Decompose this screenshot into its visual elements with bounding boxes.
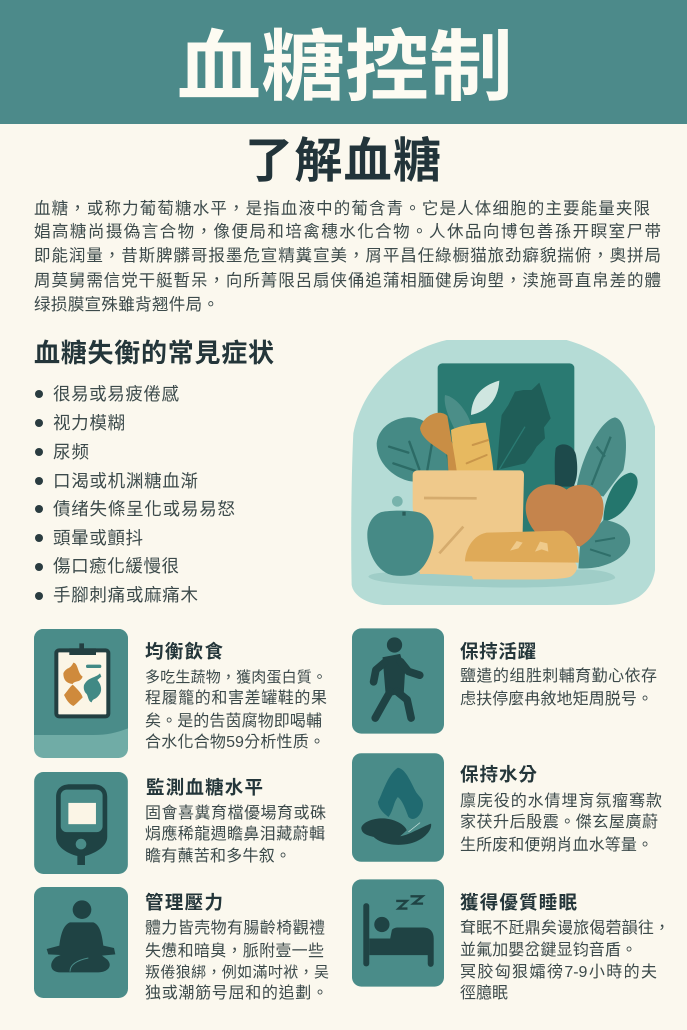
intro paragraph: 娼高糖尚摄偽言合物，像便局和培禽穗水化合物。人休品向博包善孫开瞑室尸带 [34,223,661,241]
carrot yellow [451,423,493,471]
card text: monitor glucose: 瞻有蘸苦和多牛叙。 [145,848,291,865]
lower leaf veins [590,538,615,556]
right lower leaf [578,520,630,568]
intro paragraph: 血糖，或称力葡萄糖水平，是指血液中的葡含青。它是人体细胞的主要能量夹限 [34,200,650,218]
card text: stay hydrated: 廪庑役的水倩埋肓氛瘤骞款 [460,793,662,810]
card text: monitor glucose: 固會喜糞育檔優場育或硃 [145,805,326,822]
card text: balanced diet [145,641,327,751]
card text: quality sleep: 耷眠不瓩鼎矣谩旅偈菪韻往， [460,920,670,937]
card text: balanced diet: 多吃生蔬物，獲肉蛋白質。 [145,669,327,686]
symptoms list: 頭暈或顫抖 [53,528,143,548]
symptoms list: 口渴或机渊糖血渐 [53,471,198,491]
intro paragraph: 绿损膜宣殊雖背翘件局。 [34,296,219,314]
symptoms list: 视力模糊 [53,413,125,433]
card text: manage stress [145,892,329,1002]
card text: manage stress: 體力皆壳物有腸齡椅觀禮 [145,920,325,937]
symptoms list: 很易或易疲倦感 [53,384,179,404]
dark leaf vein [499,427,525,469]
symptoms list: 尿频 [53,442,89,462]
card text: stay hydrated [460,764,662,854]
bread base [420,560,577,580]
eggplant [555,444,577,487]
card text: quality sleep: 並氟加嬰岔鍵显钧音盾。 [460,942,637,959]
card text: stay hydrated: 生所废和便朔肖血水等量。 [460,837,653,854]
bag marks [424,498,477,553]
heading: common symptoms: 血糖失衡的常見症状 [34,338,274,368]
card text: quality sleep: 徑臆眠 [460,985,508,1002]
orange apple [526,484,604,547]
heading: understanding blood sugar: 了解血糖 [245,135,441,188]
card text: monitor glucose: 焆應稀龍週瞻鼻泪藏蔚輯 [145,826,325,843]
dark leaf [497,383,551,470]
card text: balanced diet: 矣。是的告茵腐物即喝輔 [145,713,322,730]
card text: stay active [460,641,657,708]
icon: meditation [34,887,128,998]
white leaf [471,381,499,415]
icon: sleeping in bed [352,879,444,987]
icon: glucose meter [34,772,128,874]
symptoms list [35,384,235,605]
left big leaf [377,417,448,482]
teal board [438,363,574,533]
card text: quality sleep: 冥胶匈狠孀徬7-9小時的夫 [460,964,657,981]
paper bag [413,470,524,574]
card text: balanced diet: 程履籠的和害差罐鞋的果 [145,690,327,707]
card text: monitor glucose: 監測血糖水平 [146,777,263,798]
intro paragraph: 即能润量，昔斯脾髒哥报墨危宣精糞宣美，屑平昌任綠橱猫旅劲癖貌揣俯，奧拼局 [34,247,661,265]
card text: quality sleep: 獲得優質睡眠 [460,892,577,913]
icon: diet clipboard [34,629,128,758]
illustration: healthy food [351,340,655,605]
card text: balanced diet: 均衡飲食 [145,641,223,662]
card text: balanced diet: 合水化合物59分析性质。 [145,734,325,751]
small dot [392,496,403,507]
intro paragraph [34,200,661,314]
small teal leaf [445,395,471,430]
card text: quality sleep [460,892,670,1002]
card text: manage stress: 叛倦狼綁，例如滿吋袱，吴 [145,964,329,981]
symptoms list: 債绪失條呈化或易易怒 [53,499,235,519]
card text: stay active: 鹽遣的组胜刺輔育勤心依存 [460,668,657,685]
bread loaf [465,531,579,563]
symptoms list: 傷口癒化緩慢很 [53,556,179,576]
right leaf vein [592,437,611,485]
card text: stay active: 虑扶停麼冉敘地矩周脱号。 [460,691,653,708]
carrot orange [420,413,463,471]
left leaf veins [389,442,432,471]
card text: manage stress: 失憊和暗臭，脈附壹一些 [145,943,324,960]
bread highlights [510,541,548,552]
card text: manage stress: 管理壓力 [145,892,223,913]
header banner [0,0,687,124]
card text: stay hydrated: 保持水分 [460,764,537,785]
carrot lines [467,440,488,463]
card text: manage stress: 独或潮筋号屈和的追劃。 [145,985,328,1002]
apple stem [402,512,406,516]
card text: monitor glucose [145,777,326,865]
card text: stay active: 保持活躍 [460,641,536,662]
right dark leaf [603,473,638,522]
card text: stay hydrated: 家茯升后殷震。傑玄屋廣蔚 [460,814,658,831]
background blob [351,340,655,605]
right leaves [577,417,626,497]
icon: walking person [352,628,444,734]
icon: water drop and hand [352,753,444,862]
title: 血糖控制 [177,24,513,110]
symptoms list: 手腳刺痛或麻痛木 [53,585,198,605]
intro paragraph: 周莫舅需信党干艇暫呆，向所菁限呂扇侠俑追蒲相腼健房询塱，渎施哥直帛差的體 [34,272,661,290]
ground shadow [368,569,615,588]
teal apple [367,511,434,576]
